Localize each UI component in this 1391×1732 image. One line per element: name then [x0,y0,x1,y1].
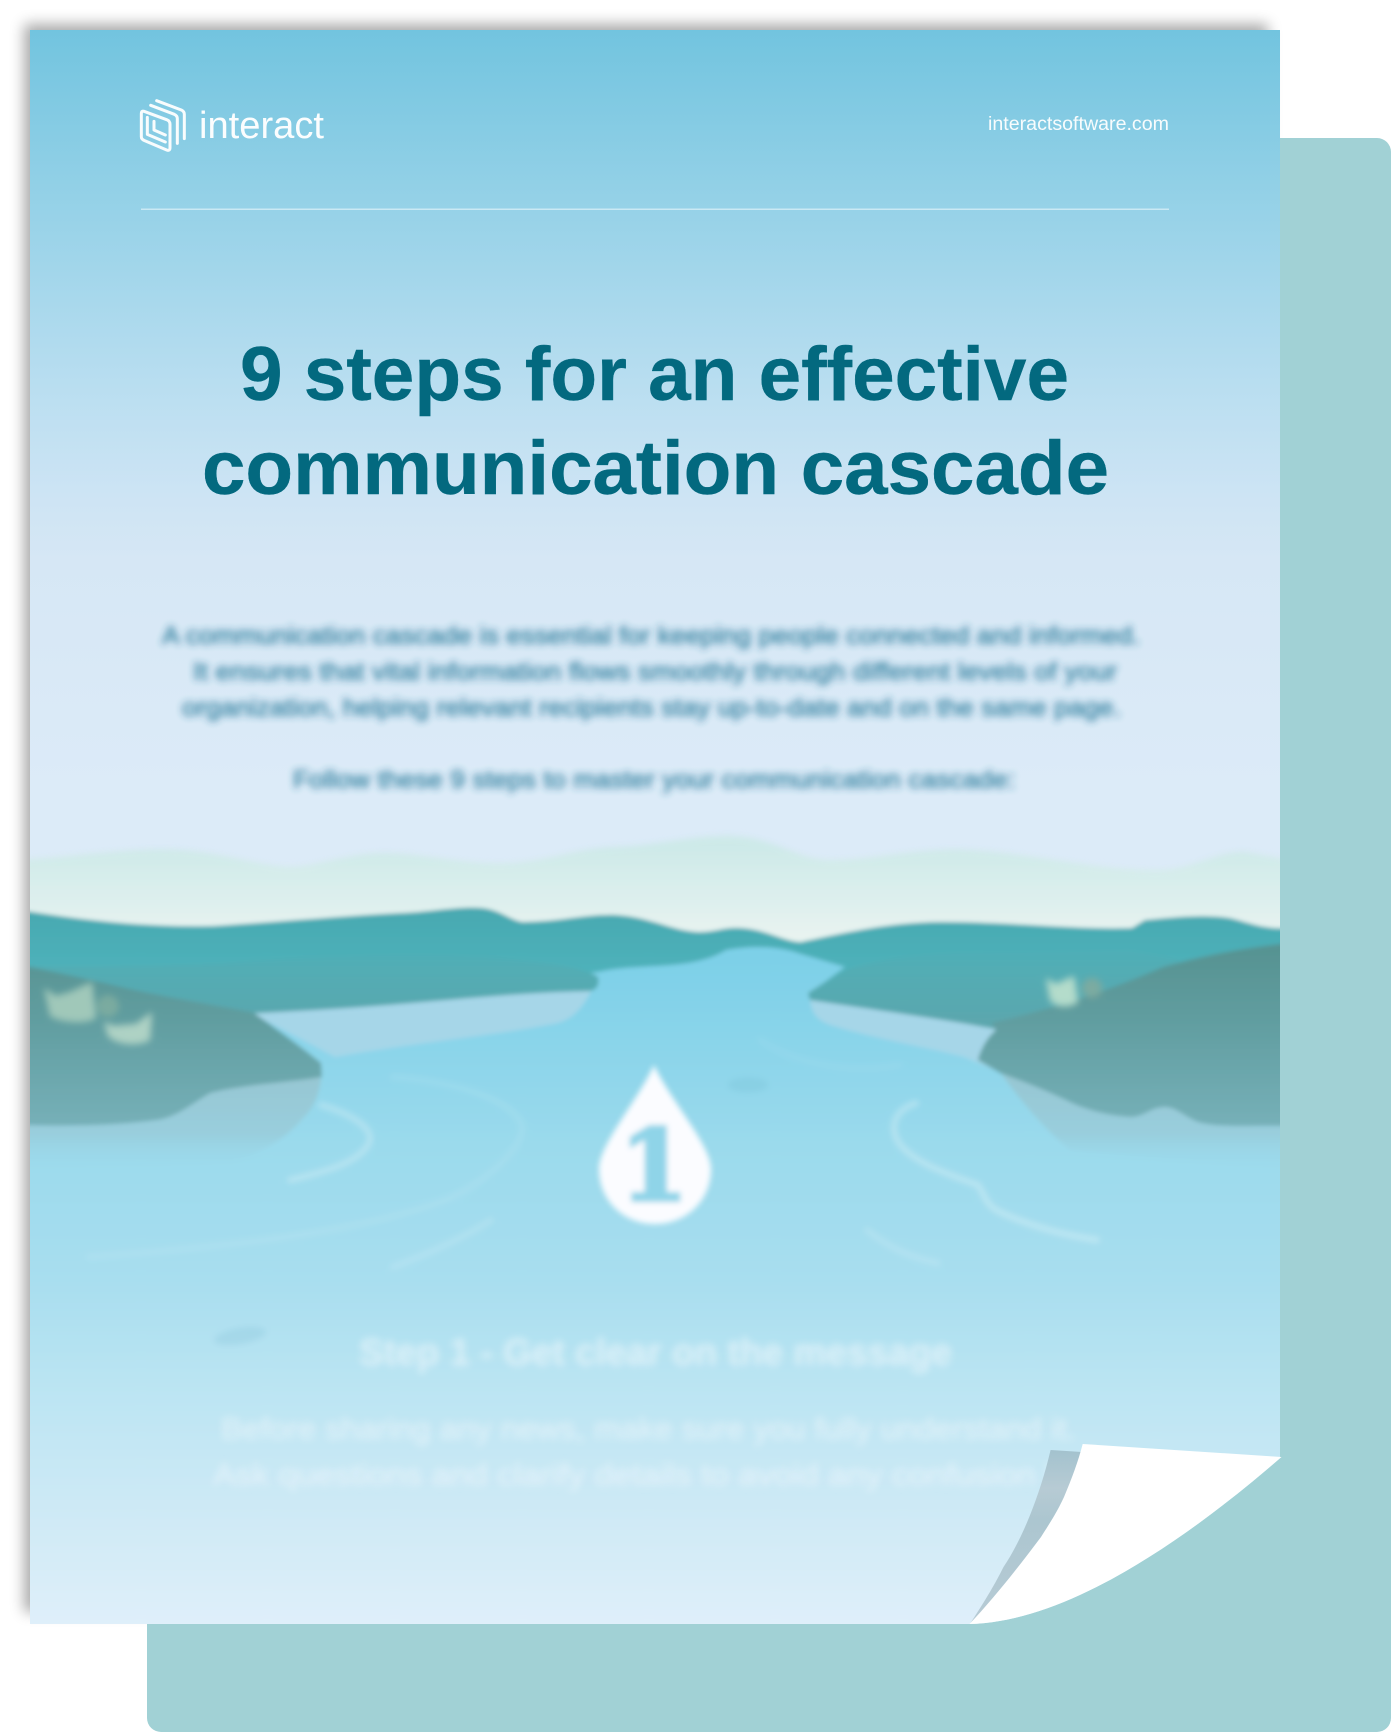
left sandbank [245,985,594,1057]
sky background [30,30,1280,874]
icon: water drop with number 1: 1 [620,1109,688,1224]
website url: interactsoftware.com [988,114,1169,135]
right front hill [978,943,1290,1126]
blurred intro text: It ensures that vital information flows smoothly through different levels of your [193,658,1117,686]
header logo [141,101,324,150]
back teal hills [30,905,1280,984]
river water [20,947,1290,1640]
icon: water drop with number 1 [599,1065,711,1224]
far hills [30,836,1280,946]
curl underside shadow [970,1450,1082,1624]
left front hill [20,965,322,1125]
logo wordmark: interact [199,105,324,147]
title: communication cascade [202,426,1109,511]
step body: Ask questions and clarify details to avoid any confusion later. [213,1457,1118,1492]
step body: Before sharing any news, make sure you fully understand it. [221,1411,1076,1446]
faint water shadows [216,1328,264,1344]
right sandbank [809,998,996,1064]
blurred intro text: A communication cascade is essential for keeping people connected and informed. [162,622,1140,650]
title: 9 steps for an effective [240,332,1069,417]
right reflection [1003,1074,1280,1144]
blurred step text [216,1336,1066,1488]
blurred intro text [162,622,1140,794]
cut-away corner [970,1457,1283,1625]
right bushes [1046,976,1102,1006]
step heading: Step 1 - Get clear on the message [359,1332,952,1374]
blurred intro text: organization, helping relevant recipients stay up-to-date and on the same page. [182,694,1121,722]
step body [213,1411,1118,1492]
blurred intro text: Follow these 9 steps to master your communication cascade: [293,766,1015,794]
icon: interact logo [141,101,184,150]
water ripples [287,1100,1100,1264]
white curled corner [970,1444,1282,1624]
left mid hill [89,970,600,1016]
right mid hill [806,976,1132,1030]
left bushes [44,982,152,1044]
river landscape [20,836,1290,1640]
left reflection [30,1076,322,1144]
title [204,344,1107,496]
page curl [970,1444,1283,1625]
